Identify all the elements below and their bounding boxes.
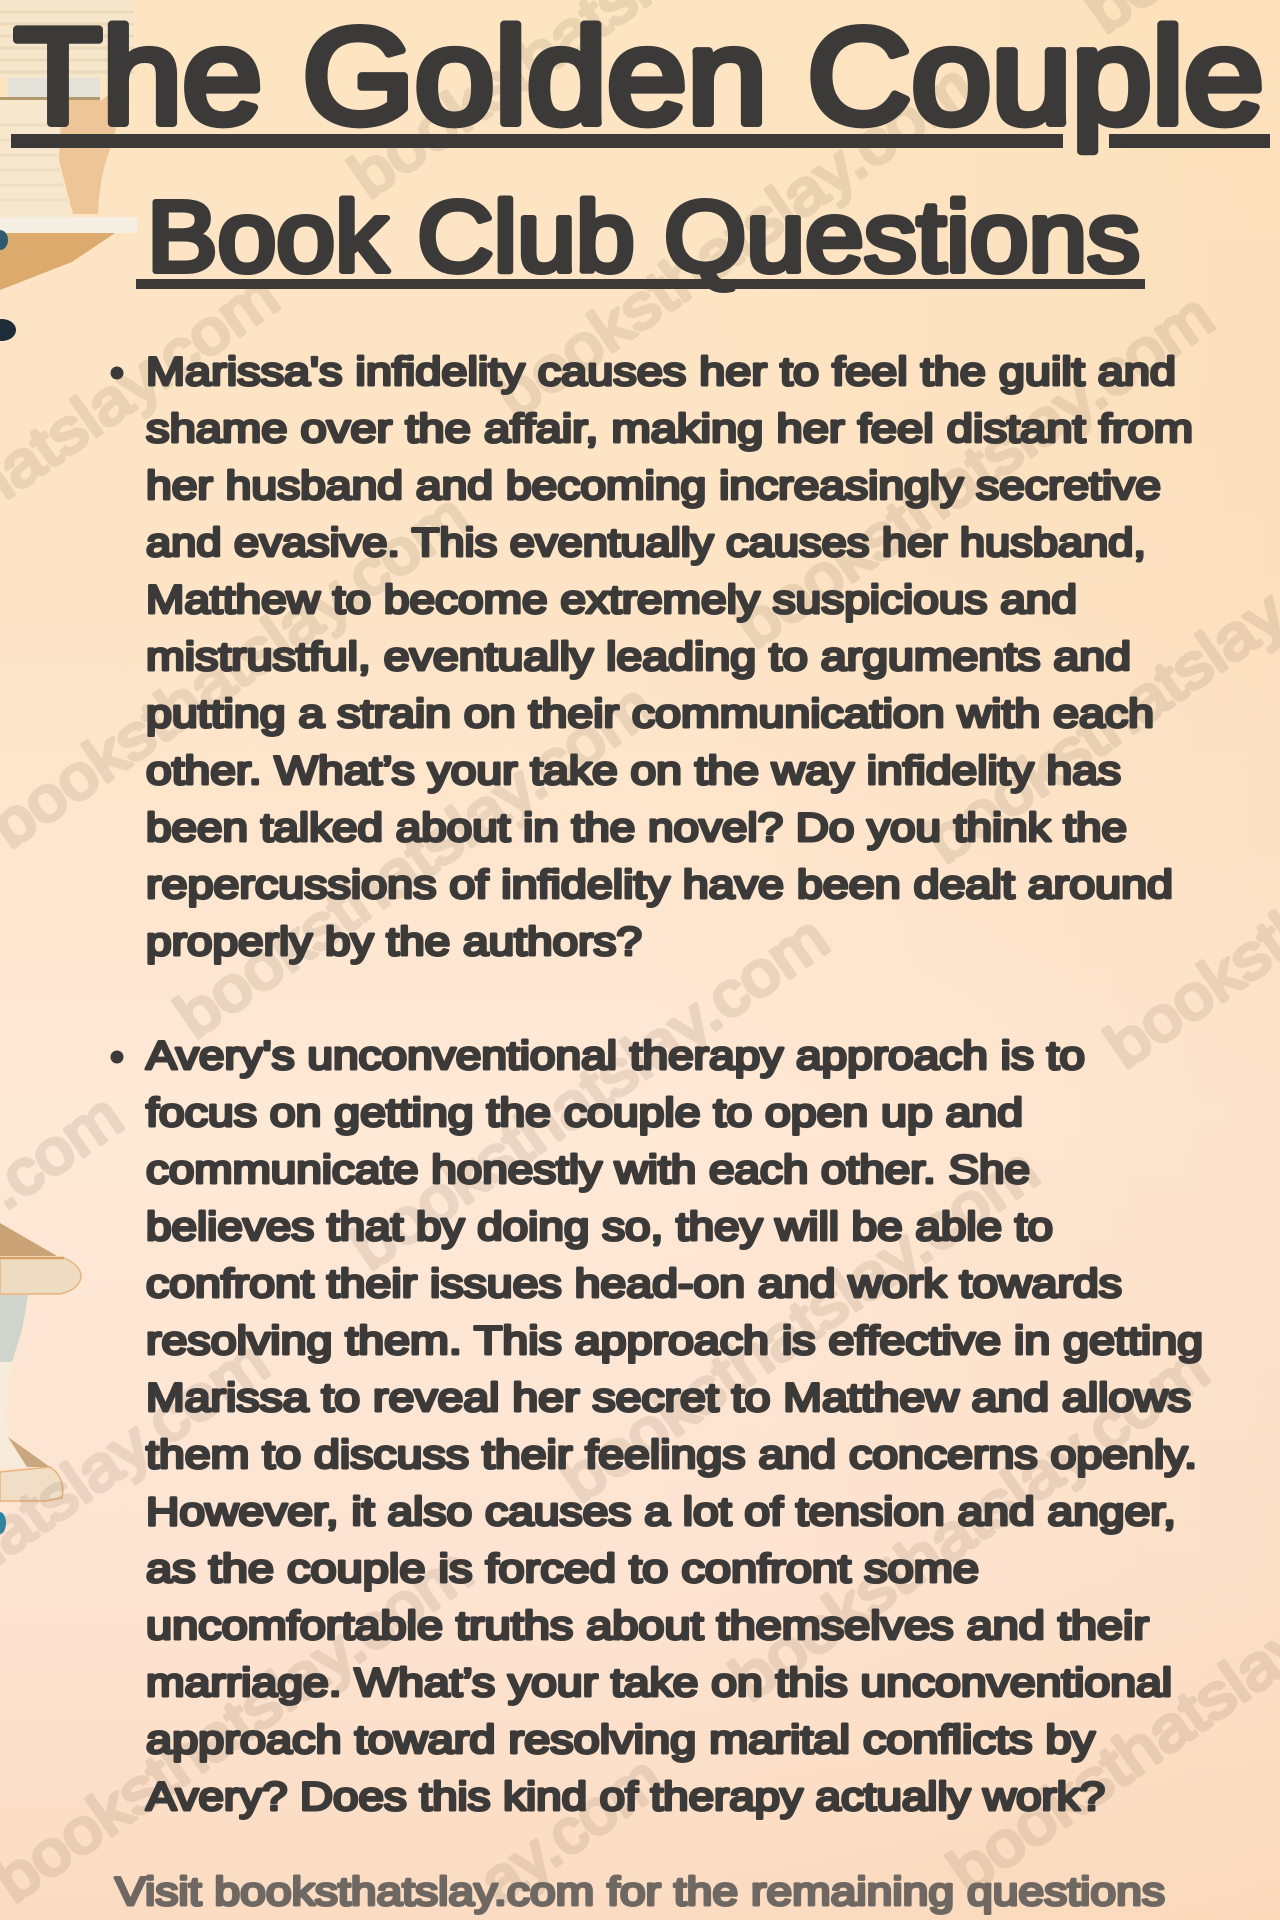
question 2 text block: focus on getting the couple to open up and xyxy=(146,1091,1023,1135)
question 2 text block: them to discuss their feelings and concerns openly. xyxy=(146,1433,1197,1477)
question 1 text block: repercussions of infidelity have been dealt around xyxy=(146,863,1173,907)
footer call to action: Visit booksthatslay.com for the remaining questions xyxy=(115,1870,1165,1914)
question 2 text block: resolving them. This approach is effective in getting xyxy=(146,1319,1203,1363)
watermarks: booksthatslay.com xyxy=(718,1334,1221,1714)
question 2 text block: approach toward resolving marital conflicts by xyxy=(146,1718,1095,1762)
question 2 text block: Avery's unconventional therapy approach is to xyxy=(146,1034,1085,1078)
question 1 text block: and evasive. This eventually causes her husband, xyxy=(146,521,1146,565)
question 2 text block: communicate honestly with each other. She xyxy=(146,1148,1030,1192)
title: The Golden Couple xyxy=(14,0,1264,152)
question 1 text block xyxy=(110,350,1193,964)
question 2 text block: Marissa to reveal her secret to Matthew and allows xyxy=(146,1376,1191,1420)
subtitle: Book Club Questions xyxy=(147,181,1140,293)
watermarks: booksthatslay.com xyxy=(163,671,666,1051)
question 1 text block: Marissa's infidelity causes her to feel the guilt and xyxy=(146,350,1176,394)
watermarks: booksthatslay.com xyxy=(338,903,841,1283)
question 2 text block: However, it also causes a lot of tension and anger, xyxy=(146,1490,1176,1534)
question 1 text block: mistrustful, eventually leading to arguments and xyxy=(146,635,1131,679)
image: lower book stack on left edge xyxy=(0,1223,81,1534)
watermarks: booksthatslay.com xyxy=(548,1135,1051,1515)
question 1 text block: other. What’s your take on the way infidelity has xyxy=(146,749,1121,793)
question 1 text block: Matthew to become extremely suspicious and xyxy=(146,578,1077,622)
question 2 text block: marriage. What’s your take on this unconventional xyxy=(146,1661,1172,1705)
watermarks: ay.com xyxy=(467,1743,675,1917)
watermarks: booksthatslay.com xyxy=(483,51,986,431)
question 2 text block xyxy=(110,1034,1203,1819)
question 1 text block: been talked about in the novel? Do you think the xyxy=(146,806,1127,850)
question 2 text block: uncomfortable truths about themselves and their xyxy=(146,1604,1149,1648)
question 2 text block: as the couple is forced to confront some xyxy=(146,1547,979,1591)
watermarks: booksthatslay.com xyxy=(723,281,1226,661)
image: top book stack on left edge xyxy=(0,0,137,341)
question 1 text block: her husband and becoming increasingly secretive xyxy=(146,464,1161,508)
question 2 text block: believes that by doing so, they will be able to xyxy=(146,1205,1053,1249)
question 1 text block: putting a strain on their communication with each xyxy=(146,692,1154,736)
question 2 text block: confront their issues head-on and work towards xyxy=(146,1262,1122,1306)
question 1 text block: properly by the authors? xyxy=(146,920,642,964)
question 1 text block: shame over the affair, making her feel distant from xyxy=(146,407,1193,451)
question 2 text block: Avery? Does this kind of therapy actually work? xyxy=(146,1775,1105,1819)
